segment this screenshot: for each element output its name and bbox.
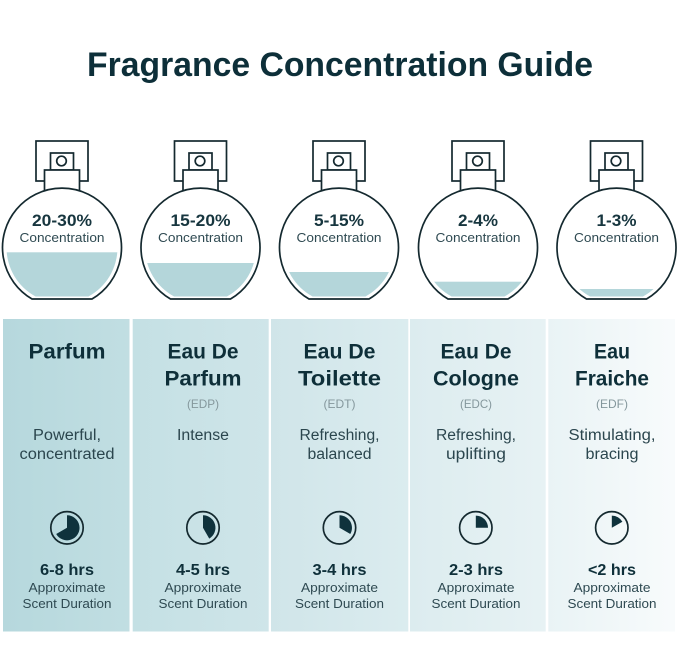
duration: under 2 hrs: Scent Duration: [568, 596, 656, 611]
bottle: Eau De Toilette 5-15%: [279, 141, 399, 302]
description: Stimulating, bracing: bracing: [586, 446, 638, 463]
heading: Eau De Cologne: Eau De: [440, 340, 512, 364]
abbreviation: EDC: (EDC): [460, 397, 492, 411]
icon: clock 4-5 hrs: [187, 512, 219, 544]
bottle: Eau De Toilette 5-15%: 5-15%: [314, 212, 364, 230]
icon: clock under 2 hrs: [596, 512, 628, 544]
duration: 6-8 hrs: Scent Duration: [22, 596, 112, 611]
duration: 3-4 hrs: Scent Duration: [295, 596, 384, 611]
duration: 6-8 hrs: Approximate: [28, 580, 106, 595]
duration: 3-4 hrs: [295, 562, 384, 611]
panel: Eau Fraiche: [548, 319, 675, 632]
icon: clock 2-3 hrs: [460, 512, 492, 544]
panel: Eau De Cologne: [410, 319, 546, 632]
bottle: Eau Fraiche 1-3%: [556, 141, 676, 303]
heading: Eau De Toilette: [298, 340, 381, 391]
bottle: Eau Fraiche 1-3%: 1-3%: [596, 212, 637, 230]
bottle: Parfum 20-30%: [2, 141, 122, 302]
heading: Eau De Toilette: Eau De: [304, 340, 376, 364]
icon: clock 3-4 hrs: [323, 512, 356, 544]
description: Stimulating, bracing: Stimulating,: [568, 427, 656, 444]
description: Parfum: [20, 427, 114, 463]
duration: 4-5 hrs: 4-5 hrs: [176, 562, 230, 579]
heading: Eau De Parfum: Eau De: [168, 340, 238, 364]
abbreviation: EDT: (EDT): [324, 397, 356, 411]
bottle: Eau De Cologne 2-4%: 2-4%: [458, 212, 498, 230]
heading: Eau Fraiche: Fraiche: [575, 368, 649, 391]
duration: 4-5 hrs: Approximate: [164, 580, 242, 595]
duration: 2-3 hrs: Approximate: [438, 580, 514, 595]
panel: Eau De Parfum: [133, 319, 269, 632]
bottle: Eau De Toilette 5-15%: Concentration: [297, 230, 381, 245]
duration: under 2 hrs: Approximate: [574, 580, 650, 595]
duration: under 2 hrs: <2 hrs: [588, 562, 636, 579]
panel: Parfum: [3, 319, 130, 632]
description: Refreshing, uplifting: uplifting: [446, 446, 506, 463]
duration: 3-4 hrs: 3-4 hrs: [312, 562, 367, 579]
abbreviation: EDP: (EDP): [187, 397, 219, 411]
description: Refreshing, balanced: Refreshing,: [300, 427, 380, 444]
duration: 6-8 hrs: 6-8 hrs: [40, 562, 94, 579]
panel: Eau De Toilette: [271, 319, 408, 632]
description: Refreshing, balanced: balanced: [308, 446, 372, 463]
heading: Eau De Cologne: Cologne: [433, 368, 519, 391]
heading: Eau De Parfum: Parfum: [164, 368, 242, 391]
duration: 6-8 hrs: [22, 562, 112, 611]
bottle: Eau De Parfum 15-20%: 15-20%: [170, 212, 231, 230]
duration: 4-5 hrs: [158, 562, 248, 611]
heading: Eau Fraiche: Eau: [594, 340, 630, 364]
description: Refreshing, uplifting: Refreshing,: [436, 427, 516, 444]
heading: Eau De Toilette: Toilette: [298, 368, 381, 391]
bottle: Eau De Cologne 2-4%: Concentration: [436, 230, 520, 245]
description: Stimulating, bracing: [568, 427, 656, 463]
duration: 2-3 hrs: [432, 562, 520, 611]
bottle: Eau Fraiche 1-3%: Concentration: [574, 230, 659, 245]
duration: 2-3 hrs: 2-3 hrs: [449, 562, 503, 579]
description: Parfum: Powerful,: [33, 427, 101, 444]
heading: Eau De Parfum: [164, 340, 242, 391]
duration: under 2 hrs: [568, 562, 656, 611]
abbreviation: EDF: (EDF): [596, 397, 628, 411]
icon: clock 6-8 hrs: [51, 512, 83, 544]
bottle: Parfum 20-30%: Concentration: [20, 230, 104, 245]
bottle: Eau De Parfum 15-20%: [140, 141, 260, 303]
description: Parfum: concentrated: [20, 446, 114, 463]
duration: 3-4 hrs: Approximate: [301, 580, 378, 595]
heading: Parfum: Parfum: [28, 340, 106, 364]
bottle: Parfum 20-30%: 20-30%: [32, 212, 92, 230]
bottle: Eau De Cologne 2-4%: [418, 141, 538, 302]
bottle: Eau De Parfum 15-20%: Concentration: [158, 230, 243, 245]
description: Intense: Intense: [177, 427, 229, 444]
title: Fragrance Concentration Guide: [87, 46, 593, 84]
heading: Eau Fraiche: [575, 340, 649, 391]
heading: Eau De Cologne: [433, 340, 519, 391]
duration: 4-5 hrs: Scent Duration: [158, 596, 248, 611]
description: Refreshing, uplifting: [436, 427, 516, 463]
duration: 2-3 hrs: Scent Duration: [432, 596, 520, 611]
description: Refreshing, balanced: [300, 427, 380, 463]
